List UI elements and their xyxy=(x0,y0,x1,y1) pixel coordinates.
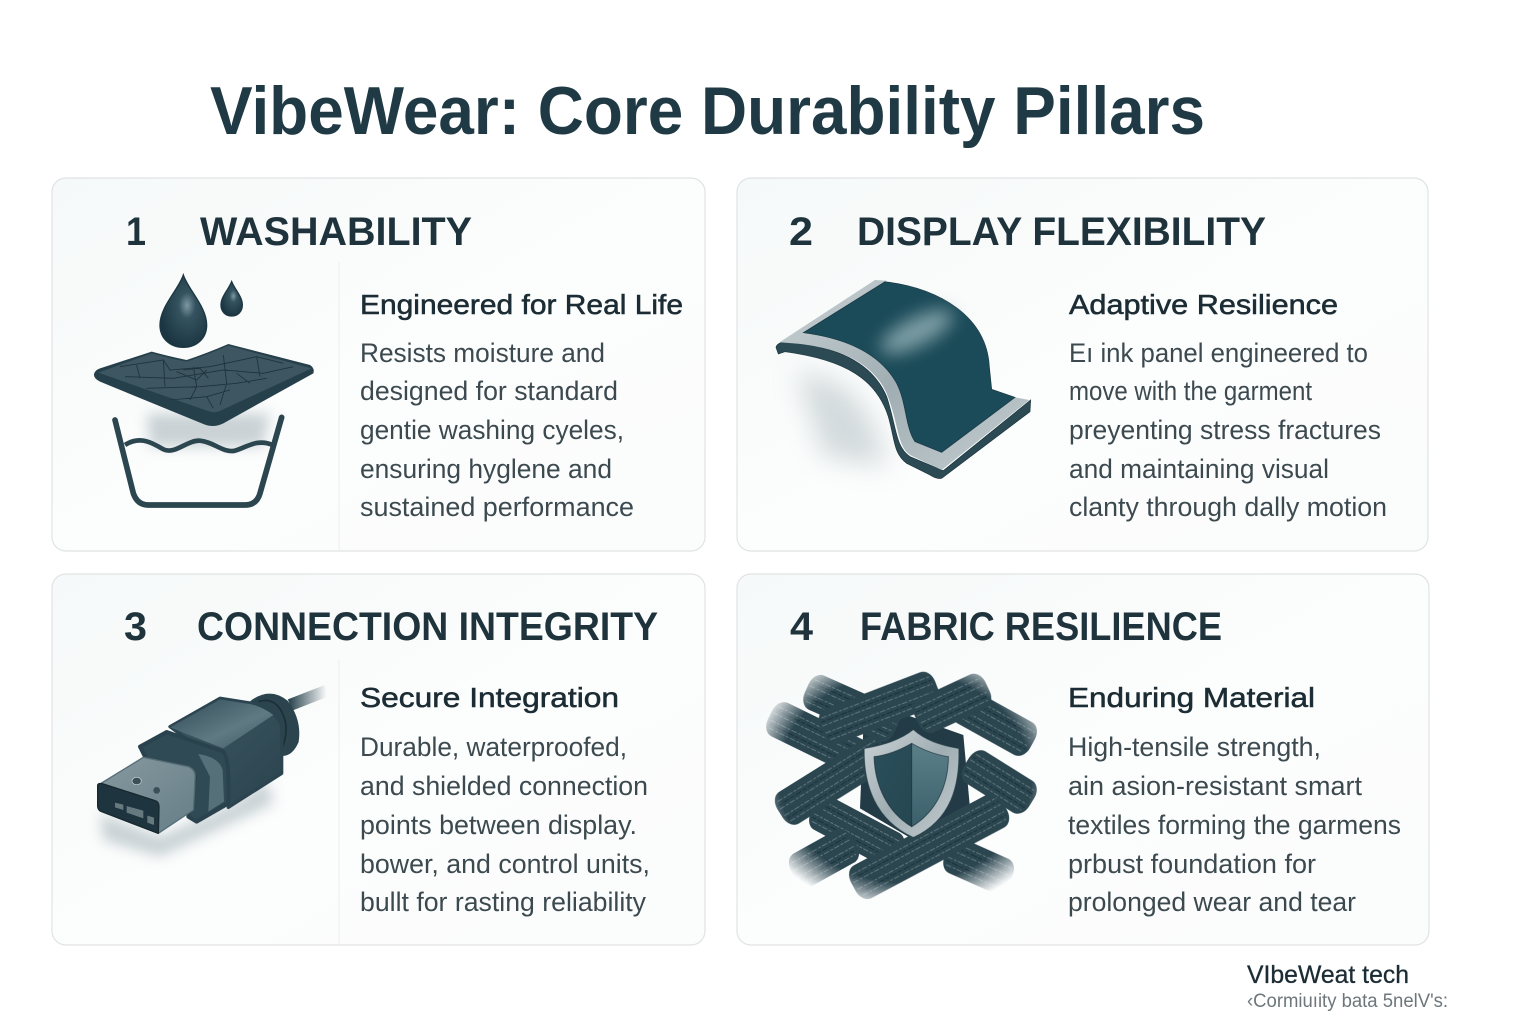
body text: designed for standard xyxy=(360,376,618,406)
body text: bullt for rasting reliability xyxy=(360,887,646,917)
body text xyxy=(1069,338,1387,522)
body text: ain asion-resistant smart xyxy=(1068,771,1362,801)
number 3: 3 xyxy=(124,605,147,649)
body text: sustained performance xyxy=(360,492,634,522)
body text xyxy=(1068,732,1401,917)
subheading: Engineered for Real Life xyxy=(360,289,683,320)
heading: connection integrity: CONNECTION INTEGRITY xyxy=(197,605,658,649)
footer brand: VIbeWeat tech xyxy=(1247,961,1409,989)
panel: fabric resilience xyxy=(737,574,1429,945)
body text: move with the garment xyxy=(1069,376,1312,406)
body text: clanty through dally motion xyxy=(1069,492,1387,522)
footer note: ‹Cormiuıity bata 5nelV's: xyxy=(1247,991,1448,1012)
body text xyxy=(360,338,634,522)
body text: High-tensile strength, xyxy=(1068,732,1321,762)
heading: fabric resilience: FABRIC RESILIENCE xyxy=(860,605,1222,649)
icon: water drops, fabric and wash tub xyxy=(94,275,314,505)
body text: points between display. xyxy=(360,810,637,840)
body text: Resists moisture and xyxy=(360,338,605,368)
body text: prolonged wear and tear xyxy=(1068,887,1356,917)
body text: and maintaining visual xyxy=(1069,454,1329,484)
body text: and shielded connection xyxy=(360,771,648,801)
number 1: 1 xyxy=(126,210,146,254)
heading: washability: WASHABILITY xyxy=(200,210,472,254)
body text: preyenting stress fractures xyxy=(1069,415,1381,445)
number 4: 4 xyxy=(790,605,814,649)
panel: display flexibility xyxy=(737,178,1428,551)
body text: prbust foundation for xyxy=(1068,849,1316,879)
body text xyxy=(360,732,650,917)
panel: connection integrity xyxy=(52,574,705,945)
body text: Eı ink panel engineered to xyxy=(1069,338,1368,368)
heading: display flexibility: DISPLAY FLEXIBILITY xyxy=(857,210,1266,254)
body text: bower, and control units, xyxy=(360,849,650,879)
body text: gentie washing cyeles, xyxy=(360,415,624,445)
subheading: Enduring Material xyxy=(1068,682,1315,713)
icon: woven fabric with shield xyxy=(762,668,1042,903)
body text: ensuring hyglene and xyxy=(360,454,612,484)
title: VibeWear: Core Durability Pillars xyxy=(210,73,1205,149)
panel: washability xyxy=(52,178,705,551)
icon: waterproof connector xyxy=(98,691,327,857)
body text: textiles forming the garmens xyxy=(1068,810,1401,840)
icon: bending e-ink panel xyxy=(776,280,1031,479)
subheading: Adaptive Resilience xyxy=(1069,289,1338,320)
subheading: Secure Integration xyxy=(360,682,619,713)
number 2: 2 xyxy=(789,210,813,254)
body text: Durable, waterproofed, xyxy=(360,732,627,762)
